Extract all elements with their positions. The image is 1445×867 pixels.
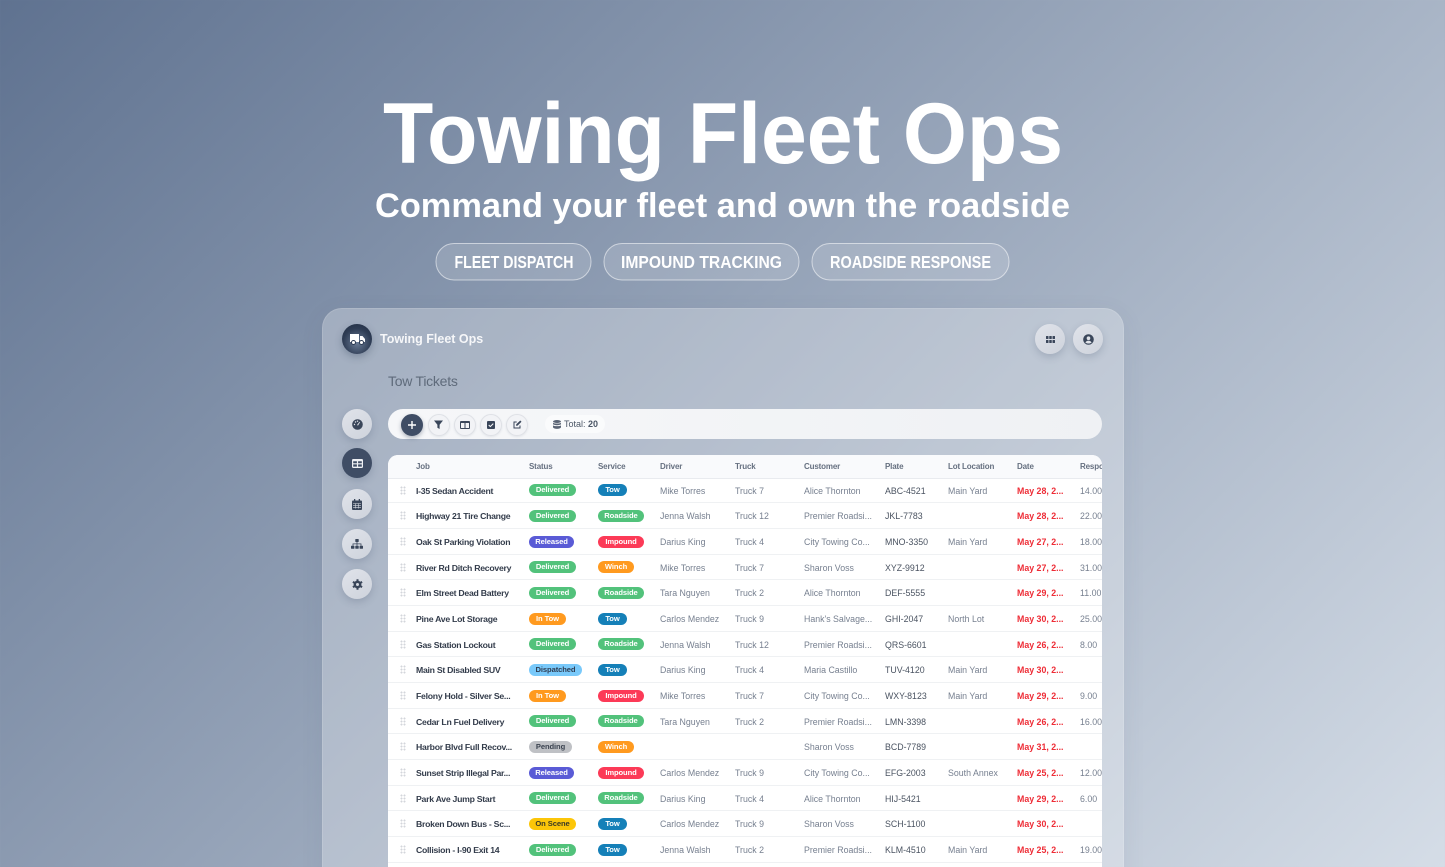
toolbar bbox=[388, 409, 1102, 439]
row: Oak St Parking Violation: City Towing Co... bbox=[804, 537, 870, 547]
row: Elm Street Dead Battery: Tara Nguyen bbox=[660, 588, 710, 598]
row: Gas Station Lockout: QRS-6601 bbox=[885, 640, 927, 650]
tag: roadside response: ROADSIDE RESPONSE bbox=[830, 252, 991, 272]
row: Felony Hold bbox=[388, 683, 1102, 709]
row: Sunset Strip Illegal Parking: Truck 9 bbox=[735, 768, 764, 778]
row: Felony Hold: Mike Torres bbox=[660, 691, 705, 701]
row: Harbor Blvd Full Recovery: Harbor Blvd Full Recov... bbox=[416, 742, 512, 752]
row: Main St Disabled SUV: May 30, 2... bbox=[1017, 665, 1063, 675]
row: River Rd Ditch Recovery: May 27, 2... bbox=[1017, 563, 1063, 573]
row: Main St Disabled SUV: Maria Castillo bbox=[804, 665, 857, 675]
row: Collision I-90 Exit 14: Collision - I-90 Exit 14 bbox=[416, 845, 499, 855]
row: Highway 21 Tire Change: Jenna Walsh bbox=[660, 511, 711, 521]
row: Broken Down Bus: May 30, 2... bbox=[1017, 819, 1063, 829]
row: I-35 Sedan Accident: Delivered bbox=[536, 485, 569, 494]
row: Park Ave Jump Start: Alice Thornton bbox=[804, 794, 861, 804]
row: Cedar Ln Fuel Delivery: May 26, 2... bbox=[1017, 717, 1063, 727]
row: Pine Ave Lot Storage: May 30, 2... bbox=[1017, 614, 1063, 624]
row: Highway 21 Tire Change: Roadside bbox=[604, 511, 638, 520]
row: Broken Down Bus: Sharon Voss bbox=[804, 819, 854, 829]
subtitle: Command your fleet and own the roadside bbox=[375, 187, 1070, 225]
row: Felony Hold: Truck 7 bbox=[735, 691, 764, 701]
table header: Service bbox=[598, 462, 625, 471]
icon: user account button bbox=[1073, 324, 1103, 354]
row: Cedar Ln Fuel Delivery: Truck 2 bbox=[735, 717, 764, 727]
row: Collision I-90 Exit 14: Tow bbox=[605, 845, 620, 854]
row: Felony Hold: WXY-8123 bbox=[885, 691, 927, 701]
row: Elm Street Dead Battery: Roadside bbox=[604, 588, 638, 597]
row: Gas Station Lockout: Gas Station Lockout bbox=[416, 640, 495, 650]
row: Felony Hold: Felony Hold - Silver Se... bbox=[416, 691, 510, 701]
row: Pine Ave Lot Storage: Carlos Mendez bbox=[660, 614, 719, 624]
row: Sunset Strip Illegal Parking: EFG-2003 bbox=[885, 768, 926, 778]
table header: Driver bbox=[660, 462, 682, 471]
tag: roadside response bbox=[812, 244, 1009, 280]
row: Felony Hold: Impound bbox=[605, 691, 637, 700]
row: Park Ave Jump Start bbox=[388, 786, 1102, 811]
row: I-35 Sedan Accident: ABC-4521 bbox=[885, 486, 926, 496]
row: I-35 Sedan Accident: Main Yard bbox=[948, 486, 987, 496]
row: Main St Disabled SUV: Truck 4 bbox=[735, 665, 764, 675]
row: I-35 Sedan Accident: Alice Thornton bbox=[804, 486, 861, 496]
row: Elm Street Dead Battery: Truck 2 bbox=[735, 588, 764, 598]
row: I-35 Sedan Accident: 14.00 bbox=[1080, 486, 1102, 496]
row: Gas Station Lockout: Delivered bbox=[536, 639, 569, 648]
row: Main St Disabled SUV bbox=[388, 657, 1102, 683]
row: Felony Hold: City Towing Co... bbox=[804, 691, 870, 701]
select button bbox=[480, 414, 502, 436]
row: Highway 21 Tire Change: JKL-7783 bbox=[885, 511, 923, 521]
row: Felony Hold: In Tow bbox=[536, 691, 559, 700]
row: Broken Down Bus: Carlos Mendez bbox=[660, 819, 719, 829]
row: Pine Ave Lot Storage: North Lot bbox=[948, 614, 984, 624]
row: Oak St Parking Violation: Oak St Parking Violation bbox=[416, 537, 510, 547]
sidebar icon: calendar bbox=[342, 489, 372, 519]
icon: apps grid button bbox=[1035, 324, 1065, 354]
row: Highway 21 Tire Change: Premier Roadsi... bbox=[804, 511, 872, 521]
row: Park Ave Jump Start: HIJ-5421 bbox=[885, 794, 921, 804]
row: Harbor Blvd Full Recovery: Sharon Voss bbox=[804, 742, 854, 752]
row: I-35 Sedan Accident: I-35 Sedan Accident bbox=[416, 486, 493, 496]
row: Highway 21 Tire Change: 22.00 bbox=[1080, 511, 1102, 521]
table header: Lot Location bbox=[948, 462, 994, 471]
row: Sunset Strip Illegal Parking: Carlos Mendez bbox=[660, 768, 719, 778]
row: I-35 Sedan Accident: May 28, 2... bbox=[1017, 486, 1063, 496]
row: Broken Down Bus: SCH-1100 bbox=[885, 819, 925, 829]
row: River Rd Ditch Recovery: Truck 7 bbox=[735, 563, 764, 573]
row: Sunset Strip Illegal Parking: South Annex bbox=[948, 768, 998, 778]
row: River Rd Ditch Recovery: XYZ-9912 bbox=[885, 563, 925, 573]
row: River Rd Ditch Recovery: River Rd Ditch Recovery bbox=[416, 563, 511, 573]
row: Oak St Parking Violation: Impound bbox=[605, 537, 637, 546]
row: Harbor Blvd Full Recovery: Pending bbox=[536, 742, 565, 751]
row: Collision I-90 Exit 14: Truck 2 bbox=[735, 845, 764, 855]
tag: fleet dispatch: FLEET DISPATCH bbox=[454, 252, 574, 272]
row: Collision I-90 Exit 14: 19.00 bbox=[1080, 845, 1102, 855]
row: Sunset Strip Illegal Parking: Released bbox=[535, 768, 568, 777]
sidebar icon: table active bbox=[342, 448, 372, 478]
row: I-35 Sedan Accident: Mike Torres bbox=[660, 486, 705, 496]
row: Pine Ave Lot Storage bbox=[388, 606, 1102, 632]
row: Gas Station Lockout: Truck 12 bbox=[735, 640, 769, 650]
row: Oak St Parking Violation: Darius King bbox=[660, 537, 705, 547]
row: Cedar Ln Fuel Delivery: Roadside bbox=[604, 716, 638, 725]
row: Collision I-90 Exit 14: Jenna Walsh bbox=[660, 845, 711, 855]
table header: Status bbox=[529, 462, 553, 471]
edit button bbox=[506, 414, 528, 436]
row: Gas Station Lockout: Roadside bbox=[604, 639, 638, 648]
row: Pine Ave Lot Storage: GHI-2047 bbox=[885, 614, 923, 624]
row: Highway 21 Tire Change: Truck 12 bbox=[735, 511, 769, 521]
row: Pine Ave Lot Storage: Pine Ave Lot Storage bbox=[416, 614, 497, 624]
hero header bbox=[375, 86, 1070, 280]
row: River Rd Ditch Recovery: 31.00 bbox=[1080, 563, 1102, 573]
brand name: Towing Fleet Ops bbox=[380, 332, 483, 346]
row: Gas Station Lockout bbox=[388, 632, 1102, 657]
row: Harbor Blvd Full Recovery: Winch bbox=[605, 742, 627, 751]
row: I-35 Sedan Accident bbox=[388, 478, 1102, 503]
row: Cedar Ln Fuel Delivery: LMN-3398 bbox=[885, 717, 926, 727]
row: Elm Street Dead Battery bbox=[388, 580, 1102, 606]
row: Elm Street Dead Battery: 11.00 bbox=[1080, 588, 1101, 598]
row: Collision I-90 Exit 14: KLM-4510 bbox=[885, 845, 926, 855]
table header: Customer bbox=[804, 462, 840, 471]
row: Collision I-90 Exit 14: Premier Roadsi... bbox=[804, 845, 872, 855]
row: Highway 21 Tire Change: Highway 21 Tire Change bbox=[416, 511, 510, 521]
row: Pine Ave Lot Storage: 25.00 bbox=[1080, 614, 1102, 624]
row: Broken Down Bus: Truck 9 bbox=[735, 819, 764, 829]
row: River Rd Ditch Recovery: Mike Torres bbox=[660, 563, 705, 573]
row: Cedar Ln Fuel Delivery: Delivered bbox=[536, 716, 569, 725]
row: Collision I-90 Exit 14: Main Yard bbox=[948, 845, 987, 855]
row: Pine Ave Lot Storage: Truck 9 bbox=[735, 614, 764, 624]
row: Elm Street Dead Battery: May 29, 2... bbox=[1017, 588, 1063, 598]
row: River Rd Ditch Recovery: Sharon Voss bbox=[804, 563, 854, 573]
row: Elm Street Dead Battery: Delivered bbox=[536, 588, 569, 597]
sidebar icon: dashboard bbox=[342, 409, 372, 439]
row: Cedar Ln Fuel Delivery: Premier Roadsi... bbox=[804, 717, 872, 727]
row: Felony Hold: May 29, 2... bbox=[1017, 691, 1063, 701]
row: I-35 Sedan Accident: Tow bbox=[605, 485, 620, 494]
app window panel bbox=[322, 308, 1124, 867]
row: Park Ave Jump Start: Darius King bbox=[660, 794, 705, 804]
row: Broken Down Bus bbox=[388, 811, 1102, 837]
row: Cedar Ln Fuel Delivery: Cedar Ln Fuel Delivery bbox=[416, 717, 504, 727]
row: Collision I-90 Exit 14: Delivered bbox=[536, 845, 569, 854]
row: Cedar Ln Fuel Delivery: Tara Nguyen bbox=[660, 717, 710, 727]
row: Gas Station Lockout: May 26, 2... bbox=[1017, 640, 1063, 650]
total count: 20 bbox=[588, 419, 598, 429]
add button bbox=[401, 414, 423, 436]
row: Main St Disabled SUV: TUV-4120 bbox=[885, 665, 925, 675]
row: Sunset Strip Illegal Parking bbox=[388, 760, 1102, 786]
row: I-35 Sedan Accident: Truck 7 bbox=[735, 486, 764, 496]
row: Cedar Ln Fuel Delivery bbox=[388, 709, 1102, 734]
row: Oak St Parking Violation: MNO-3350 bbox=[885, 537, 928, 547]
row: River Rd Ditch Recovery: Winch bbox=[605, 562, 627, 571]
row: Sunset Strip Illegal Parking: 12.00 bbox=[1080, 768, 1102, 778]
row: Pine Ave Lot Storage: Tow bbox=[605, 614, 620, 623]
tag: impound tracking: IMPOUND TRACKING bbox=[621, 252, 782, 272]
table header: Plate bbox=[885, 462, 903, 471]
row: Oak St Parking Violation bbox=[388, 529, 1102, 555]
row: Oak St Parking Violation: 18.00 bbox=[1080, 537, 1102, 547]
table header bbox=[388, 455, 1102, 479]
row: Harbor Blvd Full Recovery: May 31, 2... bbox=[1017, 742, 1063, 752]
row: Felony Hold: 9.00 bbox=[1080, 691, 1097, 701]
total count bbox=[545, 415, 605, 433]
sidebar icon: settings gear bbox=[342, 569, 372, 599]
row: Pine Ave Lot Storage: In Tow bbox=[536, 614, 559, 623]
row: Collision I-90 Exit 14: May 25, 2... bbox=[1017, 845, 1063, 855]
row: Highway 21 Tire Change: May 28, 2... bbox=[1017, 511, 1063, 521]
row: Park Ave Jump Start: Truck 4 bbox=[735, 794, 764, 804]
row: Highway 21 Tire Change bbox=[388, 503, 1102, 529]
row: Main St Disabled SUV: Tow bbox=[605, 665, 620, 674]
row: Pine Ave Lot Storage: Hank's Salvage... bbox=[804, 614, 872, 624]
columns button bbox=[454, 414, 476, 436]
row: Oak St Parking Violation: Main Yard bbox=[948, 537, 987, 547]
row: Elm Street Dead Battery: Elm Street Dead Battery bbox=[416, 588, 509, 598]
row: Oak St Parking Violation: Released bbox=[535, 537, 568, 546]
table header: Date bbox=[1017, 462, 1034, 471]
row: Park Ave Jump Start: 6.00 bbox=[1080, 794, 1097, 804]
row: Oak St Parking Violation: Truck 4 bbox=[735, 537, 764, 547]
row: Sunset Strip Illegal Parking: Sunset Strip Illegal Par... bbox=[416, 768, 510, 778]
title: Towing Fleet Ops bbox=[383, 86, 1063, 182]
row: Broken Down Bus: Tow bbox=[605, 819, 620, 828]
row: Felony Hold: Main Yard bbox=[948, 691, 987, 701]
page heading: Tow Tickets bbox=[388, 373, 458, 389]
row: Highway 21 Tire Change: Delivered bbox=[536, 511, 569, 520]
icon: truck logo bbox=[342, 324, 372, 354]
row: Park Ave Jump Start: Delivered bbox=[536, 793, 569, 802]
filter button bbox=[428, 414, 450, 436]
row: Park Ave Jump Start: May 29, 2... bbox=[1017, 794, 1063, 804]
row: Broken Down Bus: Broken Down Bus - Sc... bbox=[416, 819, 510, 829]
row: Sunset Strip Illegal Parking: Impound bbox=[605, 768, 637, 777]
row: River Rd Ditch Recovery bbox=[388, 555, 1102, 580]
row: Park Ave Jump Start: Roadside bbox=[604, 793, 638, 802]
row: River Rd Ditch Recovery: Delivered bbox=[536, 562, 569, 571]
row: Cedar Ln Fuel Delivery: 16.00 bbox=[1080, 717, 1102, 727]
row: Collision I-90 Exit 14 bbox=[388, 837, 1102, 863]
row: Elm Street Dead Battery: DEF-5555 bbox=[885, 588, 925, 598]
total count: Total: bbox=[564, 419, 586, 429]
row: Harbor Blvd Full Recovery: BCD-7789 bbox=[885, 742, 926, 752]
row: Park Ave Jump Start: Park Ave Jump Start bbox=[416, 794, 495, 804]
sidebar icon: org chart bbox=[342, 529, 372, 559]
row: Oak St Parking Violation: May 27, 2... bbox=[1017, 537, 1063, 547]
row: Main St Disabled SUV: Main St Disabled SUV bbox=[416, 665, 500, 675]
row: Main St Disabled SUV: Darius King bbox=[660, 665, 705, 675]
tag: impound tracking bbox=[604, 244, 799, 280]
row: Gas Station Lockout: Jenna Walsh bbox=[660, 640, 711, 650]
row: Gas Station Lockout: Premier Roadsi... bbox=[804, 640, 872, 650]
table header: Job bbox=[416, 462, 430, 471]
table header: Truck bbox=[735, 462, 756, 471]
row: Harbor Blvd Full Recovery bbox=[388, 734, 1102, 760]
tag: fleet dispatch bbox=[436, 244, 591, 280]
row: Broken Down Bus: On Scene bbox=[535, 819, 570, 828]
row: Gas Station Lockout: 8.00 bbox=[1080, 640, 1097, 650]
row: Main St Disabled SUV: Main Yard bbox=[948, 665, 987, 675]
row: Main St Disabled SUV: Dispatched bbox=[536, 665, 575, 674]
row: Sunset Strip Illegal Parking: May 25, 2... bbox=[1017, 768, 1063, 778]
row: Elm Street Dead Battery: Alice Thornton bbox=[804, 588, 861, 598]
row: Sunset Strip Illegal Parking: City Towing Co... bbox=[804, 768, 870, 778]
tickets table bbox=[388, 455, 1102, 867]
